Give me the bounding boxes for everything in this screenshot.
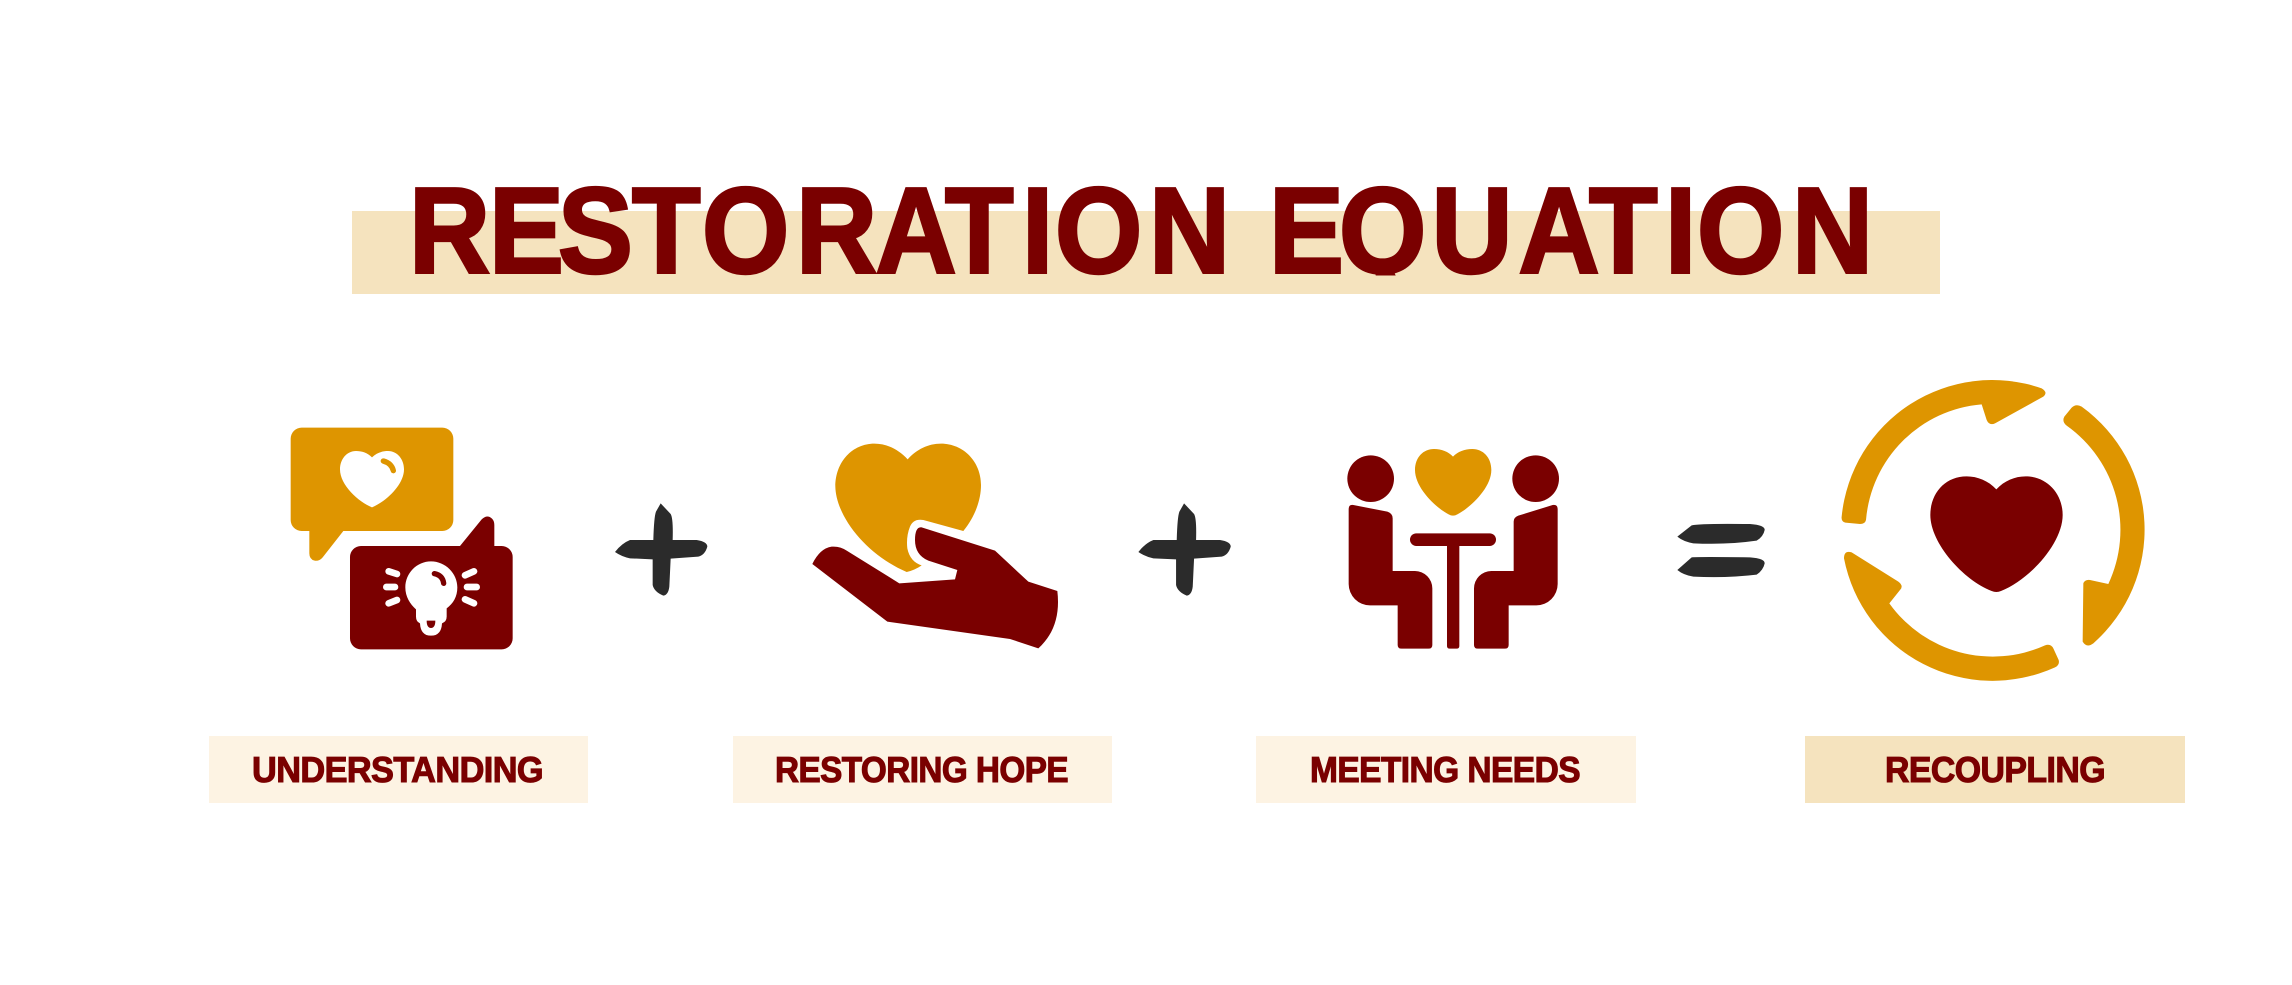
label: recoupling: RECOUPLING [1885, 749, 2105, 790]
label: understanding: UNDERSTANDING [252, 749, 543, 790]
icon: speech bubbles with heart and light bulb [291, 428, 513, 649]
icon: circular arrows around heart [1842, 380, 2145, 681]
label: recoupling [1805, 736, 2185, 803]
equals sign [1677, 524, 1765, 577]
label: meeting needs: MEETING NEEDS [1310, 749, 1580, 790]
label: understanding [209, 736, 588, 803]
label: meeting needs [1256, 736, 1636, 803]
icon: hand holding heart [812, 444, 1058, 648]
icon: two people at a table with heart [1347, 449, 1559, 649]
plus sign 2 [1138, 503, 1231, 596]
title [415, 186, 1867, 276]
label: restoring hope: RESTORING HOPE [775, 749, 1068, 790]
label: restoring hope [733, 736, 1112, 803]
title: RESTORATION [409, 162, 1230, 298]
plus sign 1 [615, 503, 707, 596]
title: EQUATION [1269, 162, 1873, 298]
title band [352, 211, 1940, 294]
